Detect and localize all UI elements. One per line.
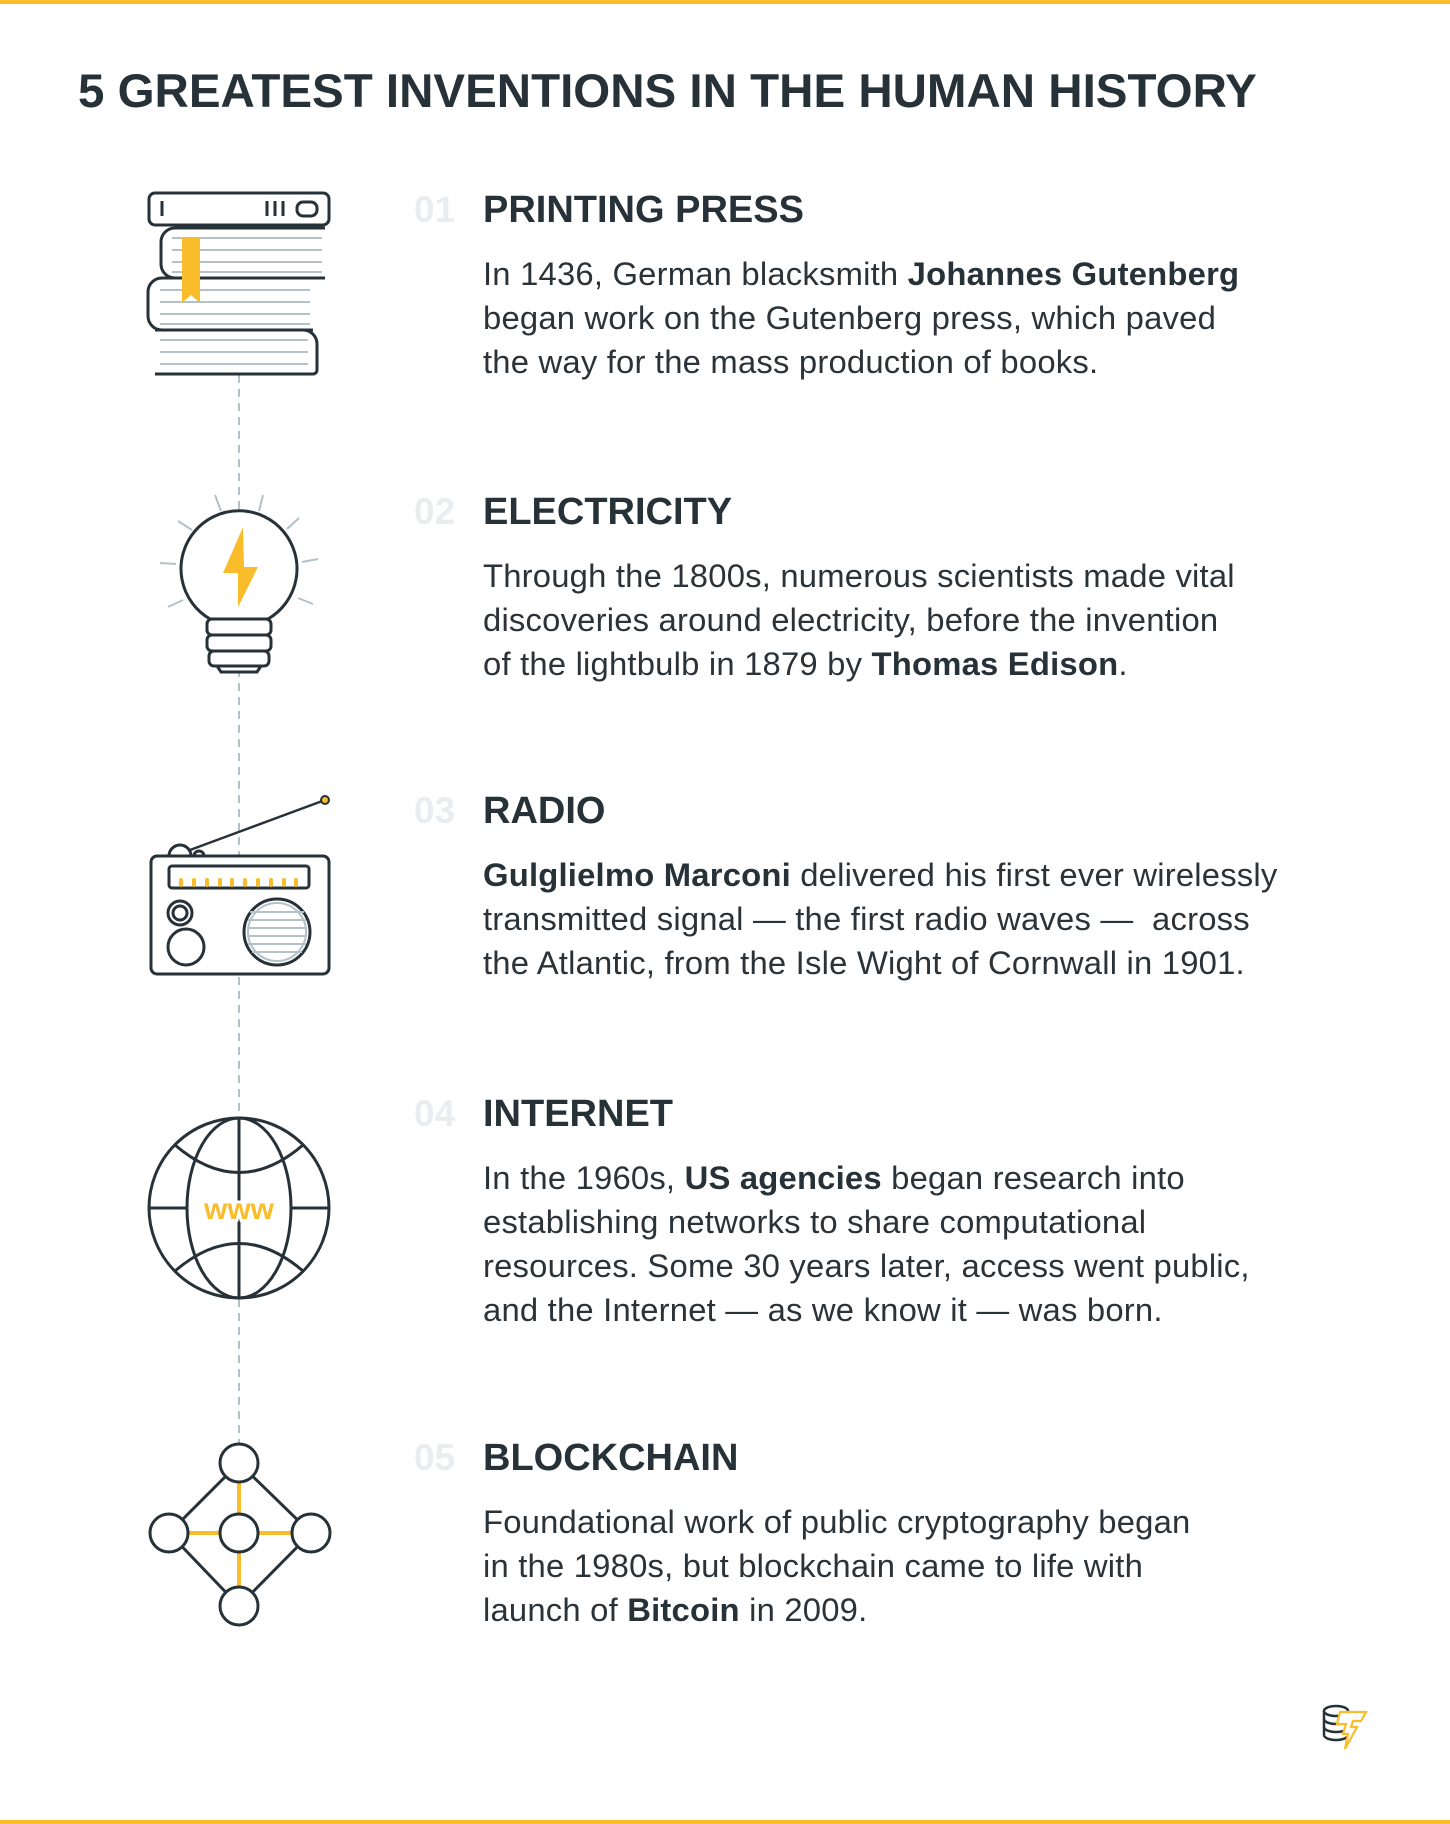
text: BLOCKCHAIN xyxy=(483,1437,738,1479)
text: 02 xyxy=(414,491,455,532)
text: 05 xyxy=(414,1437,455,1478)
icons column xyxy=(146,192,332,1626)
text: transmitted signal — the first radio waves — across xyxy=(483,900,1250,937)
icon: lightbulb xyxy=(160,495,318,672)
section 05: blockchain xyxy=(414,1437,1190,1628)
text: 04 xyxy=(414,1093,455,1134)
text: 03 xyxy=(414,790,455,831)
text: in the 1980s, but blockchain came to life with xyxy=(483,1547,1143,1584)
title: 5 GREATEST INVENTIONS IN THE HUMAN HISTORY xyxy=(78,65,1257,118)
text: began work on the Gutenberg press, which paved xyxy=(483,299,1216,336)
timeline dashed line xyxy=(238,375,240,1445)
text: 01 xyxy=(414,189,455,230)
text: of the lightbulb in 1879 by Thomas Edison. xyxy=(483,645,1128,682)
text: PRINTING PRESS xyxy=(483,189,804,231)
section 03: radio xyxy=(414,790,1278,981)
text: In the 1960s, US agencies began research into xyxy=(483,1159,1185,1196)
icon: globe www: www xyxy=(203,1193,275,1226)
text: Through the 1800s, numerous scientists made vital xyxy=(483,557,1235,594)
icon: globe www xyxy=(149,1118,329,1298)
text: establishing networks to share computational xyxy=(483,1203,1146,1240)
section 01: printing press xyxy=(414,189,1239,380)
text: the Atlantic, from the Isle Wight of Cornwall in 1901. xyxy=(483,944,1245,981)
text: launch of Bitcoin in 2009. xyxy=(483,1591,867,1628)
section 04: internet xyxy=(414,1093,1250,1328)
icon: radio xyxy=(151,796,329,974)
text: Foundational work of public cryptography began xyxy=(483,1503,1190,1540)
text: In 1436, German blacksmith Johannes Gutenberg xyxy=(483,255,1239,292)
text: and the Internet — as we know it — was born. xyxy=(483,1291,1163,1328)
text: RADIO xyxy=(483,790,605,832)
logo xyxy=(1322,1704,1368,1750)
icon: books xyxy=(148,193,329,374)
section 02: electricity xyxy=(414,491,1235,682)
text: resources. Some 30 years later, access went public, xyxy=(483,1247,1250,1284)
text: discoveries around electricity, before the invention xyxy=(483,601,1218,638)
text: ELECTRICITY xyxy=(483,491,732,533)
text: INTERNET xyxy=(483,1093,673,1135)
text: Gulglielmo Marconi delivered his first ever wirelessly xyxy=(483,856,1277,893)
icon: blockchain network xyxy=(150,1444,330,1625)
text: the way for the mass production of books. xyxy=(483,343,1098,380)
